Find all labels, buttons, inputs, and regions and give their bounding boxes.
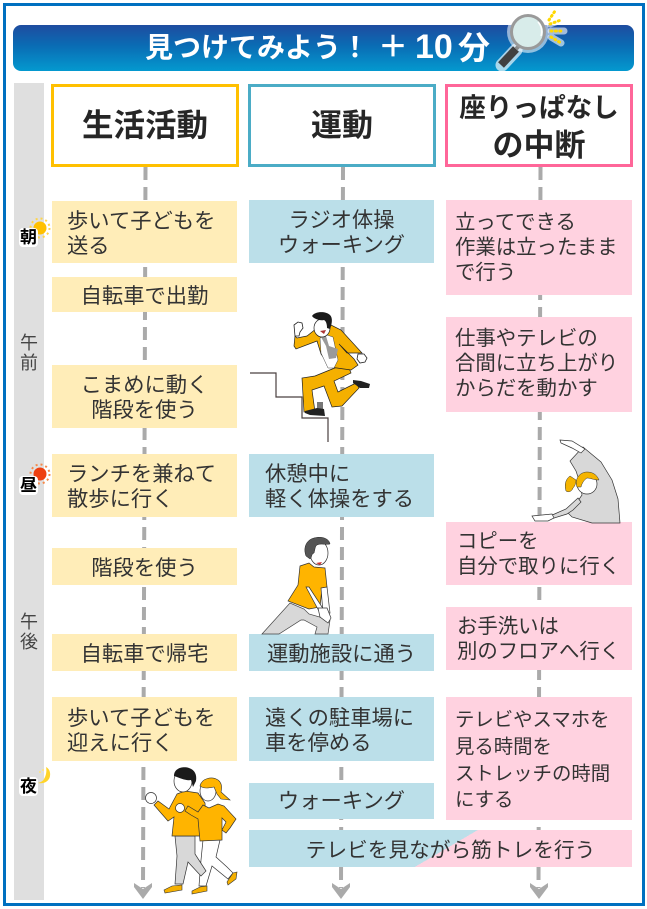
box: こまめに動く階段を使う bbox=[52, 365, 237, 428]
box: 歩いて子どもを送る: 送る bbox=[67, 234, 110, 258]
box: コピーを自分で取りに行く: 自分で取りに行く bbox=[457, 556, 620, 578]
box: 休憩中に軽く体操をする: 軽く体操をする bbox=[265, 487, 414, 511]
title banner: 分 bbox=[458, 30, 490, 66]
label: 午後 bbox=[20, 612, 38, 652]
label: 午前: 午 bbox=[20, 333, 38, 353]
right trouser and shoes bbox=[302, 363, 359, 412]
box: コピーを自分で取りに行く bbox=[446, 522, 632, 585]
box: 立ってできる作業は立ったままで行う: 作業は立ったまま bbox=[455, 237, 618, 259]
box: 歩いて子どもを迎えに行く bbox=[52, 697, 237, 761]
box: 運動施設に通う: 運動施設に通う bbox=[267, 642, 416, 666]
heading: 運動: 運動 bbox=[311, 108, 373, 143]
box: 歩いて子どもを送る bbox=[52, 201, 237, 263]
box: テレビやスマホを見る時間をストレッチの時間にする: 見る時間を bbox=[455, 736, 552, 758]
title banner: ＋ bbox=[378, 31, 408, 64]
shoes bbox=[164, 885, 182, 893]
label: 昼: 昼 bbox=[20, 476, 37, 495]
box: テレビやスマホを見る時間をストレッチの時間にする: テレビやスマホを bbox=[455, 709, 610, 731]
box: 歩いて子どもを送る: 歩いて子どもを bbox=[67, 208, 215, 232]
box: ランチを兼ねて散歩に行く bbox=[52, 454, 237, 517]
woman legs bbox=[199, 840, 233, 886]
box: 階段を使う bbox=[52, 548, 237, 585]
box: テレビやスマホを見る時間をストレッチの時間にする bbox=[446, 697, 632, 820]
box: 仕事やテレビの合間に立ち上がりからだを動かす bbox=[446, 317, 632, 412]
label: 午後: 午 bbox=[20, 612, 38, 632]
box: テレビを見ながら筋トレを行う bbox=[249, 830, 632, 867]
box: お手洗いは別のフロアへ行く: お手洗いは bbox=[457, 616, 559, 638]
illustration: couple walking bbox=[145, 767, 238, 894]
box: ウォーキング bbox=[249, 783, 434, 819]
man legs bbox=[175, 836, 206, 884]
box: テレビを見ながら筋トレを行う: テレビを見ながら筋トレを行う bbox=[306, 838, 595, 862]
heading: 生活活動: 生活活動 bbox=[82, 107, 208, 143]
box: 自転車で出勤: 自転車で出勤 bbox=[81, 284, 208, 308]
woman jacket bbox=[185, 804, 236, 841]
woman head bbox=[200, 781, 216, 801]
box: こまめに動く階段を使う: こまめに動く bbox=[81, 373, 208, 397]
box: ランチを兼ねて散歩に行く: 散歩に行く bbox=[67, 487, 174, 511]
label: 午後: 後 bbox=[20, 632, 38, 652]
box: テレビやスマホを見る時間をストレッチの時間にする: ストレッチの時間 bbox=[455, 762, 610, 784]
time-of-day strip bbox=[14, 83, 44, 900]
heading: 座りっぱなしの中断: 座りっぱなし bbox=[459, 92, 619, 122]
man jacket bbox=[154, 791, 207, 836]
heading: 運動 bbox=[248, 84, 436, 167]
box: 自転車で出勤 bbox=[52, 277, 237, 312]
box: テレビやスマホを見る時間をストレッチの時間にする: にする bbox=[455, 789, 513, 811]
fists bbox=[294, 322, 303, 336]
box: お手洗いは別のフロアへ行く bbox=[446, 607, 632, 670]
icon: magnifying glass bbox=[496, 10, 568, 71]
box: 歩いて子どもを迎えに行く: 歩いて子どもを bbox=[67, 706, 215, 730]
label: 夜: 夜 bbox=[20, 777, 37, 796]
box: 運動施設に通う bbox=[249, 634, 434, 671]
man head bbox=[174, 770, 192, 792]
heading: 生活活動 bbox=[51, 84, 239, 167]
box: ランチを兼ねて散歩に行く: ランチを兼ねて bbox=[67, 462, 216, 486]
box: 自転車で帰宅: 自転車で帰宅 bbox=[81, 642, 208, 666]
title banner: 10 bbox=[415, 28, 453, 66]
box: 立ってできる作業は立ったままで行う bbox=[446, 200, 632, 295]
icon: sun morning bbox=[30, 218, 50, 238]
box: ラジオ体操ウォーキング bbox=[249, 200, 434, 263]
label: 午前: 前 bbox=[20, 353, 38, 373]
box: お手洗いは別のフロアへ行く: 別のフロアへ行く bbox=[457, 641, 620, 663]
box: ウォーキング: ウォーキング bbox=[278, 789, 405, 813]
illustration: man running up stairs bbox=[250, 312, 370, 442]
illustration: woman side stretch bbox=[532, 440, 620, 524]
title banner: 見つけてみよう！ bbox=[145, 32, 369, 63]
icon: sun noon bbox=[30, 464, 50, 484]
box: 階段を使う: 階段を使う bbox=[91, 556, 198, 580]
box: ラジオ体操ウォーキング: ラジオ体操 bbox=[288, 208, 395, 232]
box: 休憩中に軽く体操をする bbox=[249, 454, 434, 517]
box: 立ってできる作業は立ったままで行う: で行う bbox=[455, 262, 516, 284]
illustration: man stretching legs bbox=[261, 537, 332, 634]
icon: moon bbox=[38, 767, 50, 784]
box: 立ってできる作業は立ったままで行う: 立ってできる bbox=[455, 212, 576, 234]
box: 遠くの駐車場に車を停める: 遠くの駐車場に bbox=[265, 706, 414, 730]
box: コピーを自分で取りに行く: コピーを bbox=[457, 531, 539, 553]
box: 歩いて子どもを迎えに行く: 迎えに行く bbox=[67, 730, 174, 754]
title banner bbox=[13, 25, 634, 71]
box: 仕事やテレビの合間に立ち上がりからだを動かす: 合間に立ち上がり bbox=[455, 353, 618, 375]
label: 朝: 朝 bbox=[20, 228, 37, 247]
head bbox=[314, 319, 330, 337]
label: 午前 bbox=[20, 333, 38, 373]
box: 遠くの駐車場に車を停める bbox=[249, 697, 434, 761]
jacket bbox=[294, 324, 362, 370]
box: 自転車で帰宅 bbox=[52, 634, 237, 671]
box: こまめに動く階段を使う: 階段を使う bbox=[91, 398, 198, 422]
heading: 座りっぱなしの中断 bbox=[445, 84, 633, 167]
box: ラジオ体操ウォーキング: ウォーキング bbox=[278, 233, 405, 257]
box: 遠くの駐車場に車を停める: 車を停める bbox=[265, 730, 372, 754]
box: 仕事やテレビの合間に立ち上がりからだを動かす: からだを動かす bbox=[455, 378, 598, 400]
box: 仕事やテレビの合間に立ち上がりからだを動かす: 仕事やテレビの bbox=[455, 328, 598, 350]
heading: 座りっぱなしの中断: の中断 bbox=[492, 128, 586, 162]
box: 休憩中に軽く体操をする: 休憩中に bbox=[265, 462, 350, 486]
